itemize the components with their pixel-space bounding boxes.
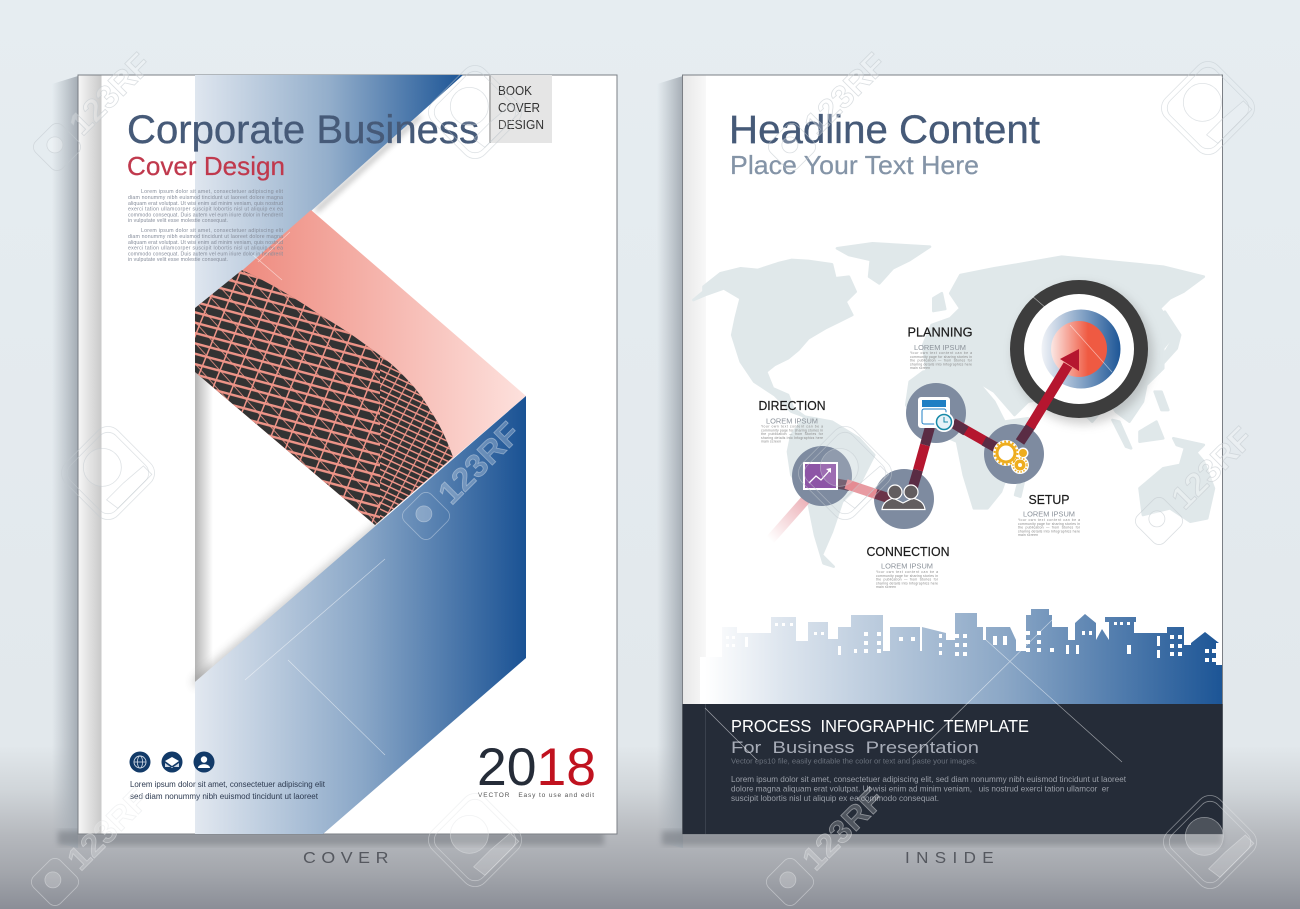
node: direction circle [792,446,852,506]
label: planning: LOREM IPSUM [914,343,966,352]
label: connection [866,545,950,589]
label: planning: the publication — from Stories for [910,358,973,362]
label: direction: sharing details into Infographics here [761,436,823,440]
target [1013,284,1153,424]
label: connection: the publication — from Stories for [876,578,939,582]
shape: lower blue band [195,396,526,834]
skyline [700,609,1222,704]
text block: footer body: dolore magna aliquam erat volutpat. Ut wisi enim ad minim veniam, uis nostrud exerci tation ullamcor er [731,784,1109,794]
caption: inside: INSIDE [905,850,1000,867]
text block: cover intro: exerci tation ullamcorper suscipit lobortis nisl ut aliquip ex ea [128,206,283,212]
text block: cover intro: aliquam erat volutpat. Ut wisi enim ad minim veniam, quis nostrud [128,201,283,207]
node: planning circle [906,383,966,443]
shape: pink band [195,210,526,525]
year: 2018: 2018 [477,738,596,797]
text block: cover intro: commodo consequat. Duis autem vel eum iriure dolor in hendrerit [128,252,284,258]
process path: faded start [770,497,808,540]
watermark: camera bottom center [423,788,527,892]
watermark: camera bottom right [1158,790,1262,894]
watermark: camera top far right [1156,56,1260,160]
label: planning: sharing details into Infographics here [910,362,972,366]
label: connection: LOREM IPSUM [881,562,933,570]
text block: contact note: sed diam nonummy nibh euismod tincidunt ut laoreet [130,791,319,801]
text block: cover intro [128,189,284,263]
text block: cover intro: in vulputate velit esse molestie consequat. [128,257,228,263]
tag: book cover design: DESIGN [498,117,544,132]
watermark: camera middle left [56,421,160,525]
right page shadow [657,76,1222,848]
text block: contact note: Lorem ipsum dolor sit amet, consectetuer adipiscing elit [130,779,326,789]
subtitle: cover design: Cover Design [127,151,285,181]
label: setup: SETUP [1028,493,1070,507]
watermark: 123RF bottom left [28,780,157,909]
panel: inside page [682,75,1222,834]
label: setup: sharing details into Infographics here [1018,530,1080,534]
watermark: 123RF bottom right page: 123RF [795,781,891,877]
watermark: 123RF bottom right page [763,780,892,909]
text block: contact note [130,779,326,801]
watermark: 123RF middle right [1132,419,1261,548]
tag: book cover design: COVER [498,100,540,115]
process path: red arrow [808,365,1068,500]
chart: world map [693,243,1214,567]
label: connection: Your own text content can be a [876,570,938,574]
text block: cover intro: exerci tation ullamcorper suscipit lobortis nisl ut aliquip ex ea [128,246,283,252]
text block: cover intro: diam nonummy nibh euismod tincidunt ut laoreet dolore magna [128,195,283,201]
label: setup: community page for sharing stories in [1018,522,1080,526]
footer band [682,704,1222,834]
photo: dome structure [190,265,460,530]
label: setup: main screen [1018,533,1038,537]
label: setup: the publication — from Stories for [1018,526,1081,530]
watermark: camera middle right page [793,421,897,525]
icon: calendar and clock [918,397,954,432]
tag: book cover design: BOOK [498,83,532,98]
text block: footer body: Lorem ipsum dolor sit amet, consectetuer adipiscing elit, sed diam nonummy nibh euismod tincidunt ut laoreet [731,774,1127,784]
label: direction: LOREM IPSUM [766,416,818,426]
label: connection: main screen [876,585,896,589]
icon: chart on screen [803,462,838,490]
label: connection: CONNECTION [866,545,950,559]
text block: cover intro: diam nonummy nibh euismod tincidunt ut laoreet dolore magna [128,234,283,240]
icon: people [882,485,925,510]
label: direction: the publication — from Stories for [761,432,824,436]
label: setup: LOREM IPSUM [1023,510,1075,518]
watermark: 123RF middle center [399,414,528,543]
tag: book cover design [489,75,552,143]
text block: cover intro: in vulputate velit esse molestie consequat. [128,218,228,224]
shape: top blue triangle [195,75,463,315]
text block: footer body: suscipit lobortis nisl ut aliquip ex ea commodo consequat. [731,793,939,803]
label: setup [1018,493,1081,537]
label: direction: main screen [761,440,781,444]
note: vector file: Vector eps10 file, easily editable the color or text and paste your images. [731,756,977,766]
node: setup circle [984,424,1044,484]
panel: cover page [78,75,617,834]
label: planning [908,326,973,370]
watermark: 123RF top left [30,45,159,174]
caption: vector easy to use and edit: VECTOR Easy to use and edit [478,792,594,799]
subtitle: place your text here: Place Your Text Here [730,150,979,180]
text block: footer body [731,774,1127,803]
label: connection: community page for sharing stories in [876,574,938,578]
watermark: 123RF bottom left: 123RF [60,781,156,877]
left page shadow [52,76,604,848]
label: direction: Your own text content can be a [761,424,823,428]
icon: gears [993,440,1029,474]
text block: cover intro: commodo consequat. Duis autem vel eum iriure dolor in hendrerit [128,212,284,218]
text block: cover intro: aliquam erat volutpat. Ut wisi enim ad minim veniam, quis nostrud [128,240,283,246]
arrow head [1060,349,1079,371]
watermark: camera top center [423,60,527,164]
watermark: 123RF middle right: 123RF [1164,420,1260,516]
heading: process infographic template: PROCESS INFOGRAPHIC TEMPLATE [731,716,1029,736]
label: connection: sharing details into Infographics here [876,582,938,586]
label: planning: community page for sharing stories in [910,355,972,359]
subheading: for business presentation: For Business Presentation [731,738,979,757]
icon: envelope [162,752,182,772]
caption: cover: COVER [303,850,394,867]
title: headline content: Headline Content [729,108,1040,152]
node: connection circle [874,469,934,529]
watermark: 123RF top right page: 123RF [797,46,893,142]
label: direction: DIRECTION [758,399,826,413]
icon: globe [130,752,150,772]
watermark: 123RF middle center: 123RF [431,415,527,511]
label: planning: Your own text content can be a [910,351,972,355]
watermark: 123RF top right page [765,45,894,174]
title: corporate business: Corporate Business [127,108,479,152]
label: planning: main screen [910,366,930,370]
text block: cover intro: Lorem ipsum dolor sit amet, consectetuer adipiscing elit [141,189,284,195]
label: planning: PLANNING [908,326,972,340]
label: setup: Your own text content can be a [1018,518,1080,522]
label: direction: community page for sharing stories in [761,428,823,432]
label: direction [758,399,826,444]
watermark: 123RF top left: 123RF [62,46,158,142]
text block: cover intro: Lorem ipsum dolor sit amet, consectetuer adipiscing elit [141,228,284,234]
icon: person [194,752,214,772]
